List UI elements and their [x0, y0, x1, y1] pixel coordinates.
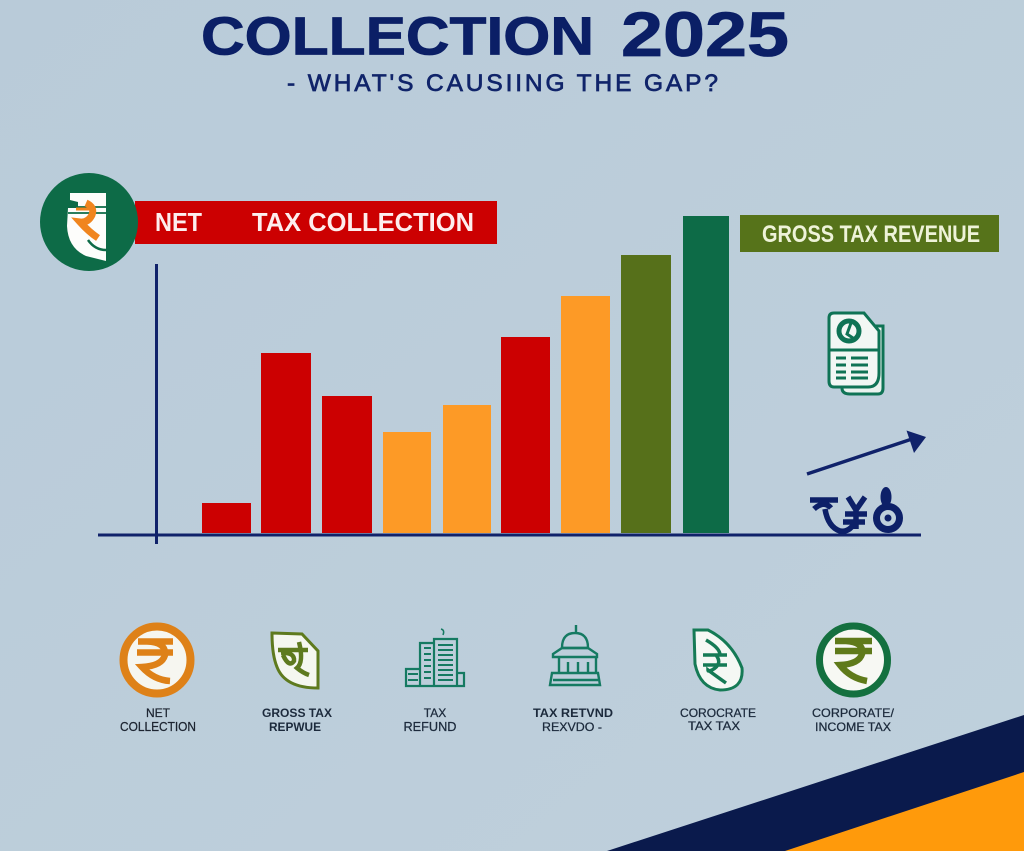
item: tax return: REXVDO -: [542, 720, 602, 734]
item: net collection: NET: [146, 706, 171, 720]
subtitle: - WHAT'S CAUSIING THE GAP?: [287, 70, 718, 97]
title: COLLECTION: [201, 6, 594, 66]
corner accent: navy stripe: [607, 715, 1024, 851]
corner accent: orange stripe: [785, 772, 1024, 851]
gross tax revenue label: [740, 215, 999, 252]
item: corporate income tax: [812, 626, 895, 734]
red banner: net tax collection: [135, 201, 497, 244]
item: corporate income tax: CORPORATE/: [812, 706, 895, 720]
item: corporate tax: TAX TAX: [688, 719, 740, 733]
item: corporate income tax: INCOME TAX: [815, 720, 891, 734]
item: tax refund: [404, 629, 464, 734]
item: corporate tax: COROCRATE: [680, 706, 756, 720]
icon: olive leaf rupee: [272, 633, 318, 688]
item: corporate tax: [680, 630, 756, 733]
bar chart: [98, 216, 921, 544]
item: net collection: [120, 626, 196, 734]
icon: government dome: [550, 625, 600, 685]
item: tax return: [533, 625, 613, 734]
arrow: rising trend: [807, 430, 926, 474]
red banner: net tax collection: TAX COLLECTION: [252, 207, 474, 237]
item: tax return: TAX RETVND: [533, 706, 613, 720]
title: [201, 0, 789, 70]
icon: green drop rupee: [694, 630, 742, 690]
item: gross tax revenue: REPWUE: [269, 720, 321, 734]
title: 2025: [621, 0, 789, 70]
icon: green olive rupee coin: [820, 626, 888, 694]
red banner: net tax collection: NET: [155, 207, 202, 237]
item: tax refund: REFUND: [404, 720, 456, 734]
icon: currency symbols: [810, 487, 900, 531]
item: net collection: COLLECTION: [120, 720, 196, 734]
item: tax refund: TAX: [424, 706, 446, 720]
gross tax revenue label: GROSS TAX REVENUE: [762, 221, 980, 248]
icon: document: [829, 313, 883, 394]
icon: green rupee badge: [40, 173, 138, 271]
item: gross tax revenue: [262, 633, 332, 734]
icon: orange rupee coin: [124, 626, 190, 694]
icon: buildings: [406, 629, 464, 686]
item: gross tax revenue: GROSS TAX: [262, 706, 332, 720]
